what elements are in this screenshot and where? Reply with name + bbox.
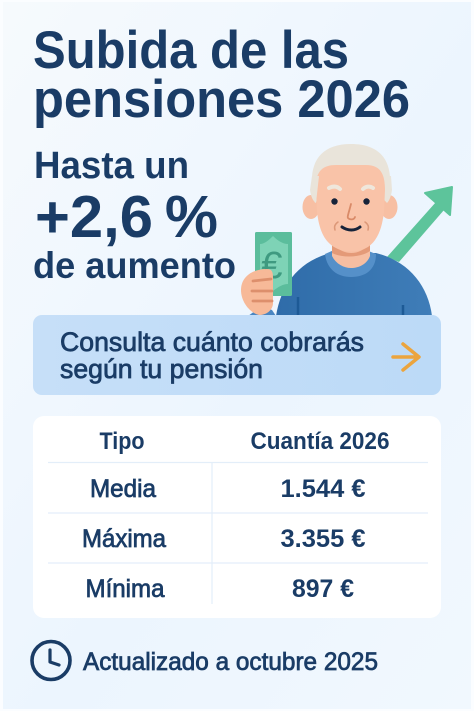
icon: rising green arrow [387,187,452,262]
row: media: Media [90,475,156,503]
footer: update date: Actualizado a octubre 2025 [83,648,378,676]
row: minima: 897 € [292,575,354,603]
hand [241,269,273,315]
hair [312,144,390,203]
banknote [255,232,292,296]
sweater collar [325,250,376,277]
panel: call to action [33,315,441,395]
row: minima: Mínima [86,575,165,603]
headline figure: up to +2,6 % increase: de aumento [33,245,236,286]
table header [100,428,390,455]
icon: orange arrow [393,344,419,370]
title: pensiones 2026 [33,70,410,129]
euro glyph on banknote: € [261,245,283,287]
row: media: 1.544 € [280,475,366,503]
eyebrows [329,187,373,189]
neck [332,236,370,268]
eyes [331,198,338,205]
call to action text: Consulta cuánto cobrarás [60,327,364,357]
table header: Cuantía 2026 [250,428,390,455]
headline figure: up to +2,6 % increase: +2,6 % [35,184,218,250]
title: Subida de las [33,21,349,80]
row: maxima: 3.355 € [280,525,366,553]
row: maxima: Máxima [82,525,166,553]
illustration: smiling pensioner holding a euro banknote [241,144,432,316]
sweater seams [298,297,403,315]
call to action text [60,327,364,384]
icon: clock [32,642,70,680]
ears [302,195,320,219]
nose [348,204,355,219]
row: maxima [82,525,366,553]
mouth [342,227,360,230]
panel: pension table [33,416,441,618]
title [33,21,410,129]
call to action text: según tu pensión [60,354,263,384]
row: media [90,475,366,503]
sweater [276,253,432,316]
smile wrinkles [335,222,368,230]
face [316,165,385,252]
left sleeve [248,306,276,316]
hair side tufts [310,176,392,203]
headline figure: up to +2,6 % increase [33,145,236,286]
table header: Tipo [100,428,144,455]
row: minima [86,575,354,603]
headline figure: up to +2,6 % increase: Hasta un [34,145,189,187]
